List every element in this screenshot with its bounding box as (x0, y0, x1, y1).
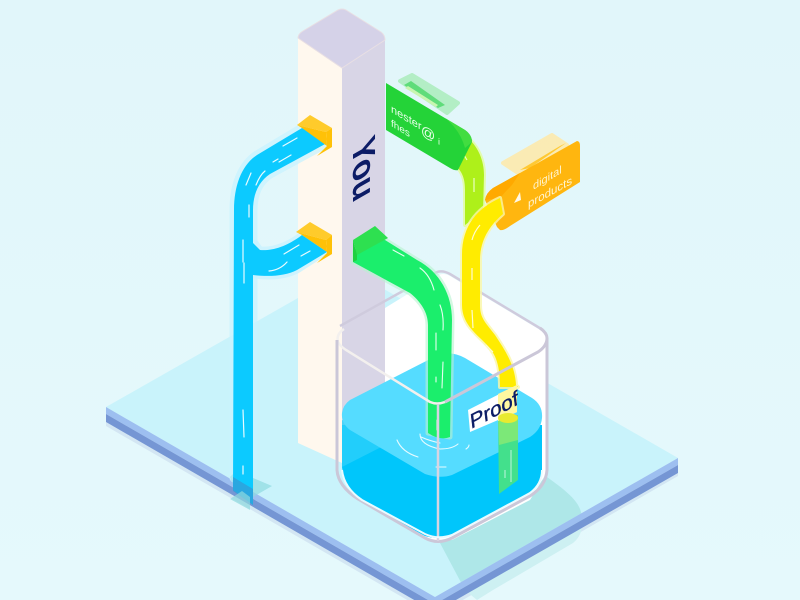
proof label (468, 385, 519, 434)
lime pipe (453, 138, 484, 225)
yellow pipe (462, 198, 518, 387)
green tag text: fhes (391, 118, 410, 140)
blue pipe (233, 128, 327, 505)
green tag text: nester (391, 102, 422, 133)
pillar: you (298, 9, 385, 463)
glass box: back (385, 274, 547, 540)
glass box: front (337, 328, 547, 542)
green pipe (353, 226, 452, 438)
proof text: Proof (469, 386, 519, 434)
orange tag text (514, 163, 572, 211)
blue pipe base shadow (230, 474, 272, 510)
yellow connector: upper (297, 115, 332, 156)
pillar label: You (346, 130, 381, 208)
water (342, 353, 542, 538)
submerged yellow-green pipe (498, 415, 518, 494)
platform (106, 269, 678, 600)
green tag text: @ (421, 122, 435, 146)
green tag text (391, 102, 440, 148)
orange tag text: digital (533, 163, 562, 193)
green tag (386, 75, 472, 170)
orange tag clip (503, 135, 567, 173)
green tag clip (400, 75, 458, 113)
orange tag text: products (528, 174, 572, 211)
green tag text: i (438, 137, 440, 148)
orange tag (485, 135, 580, 230)
yellow connector: lower (296, 222, 332, 263)
water ripples (397, 434, 469, 467)
